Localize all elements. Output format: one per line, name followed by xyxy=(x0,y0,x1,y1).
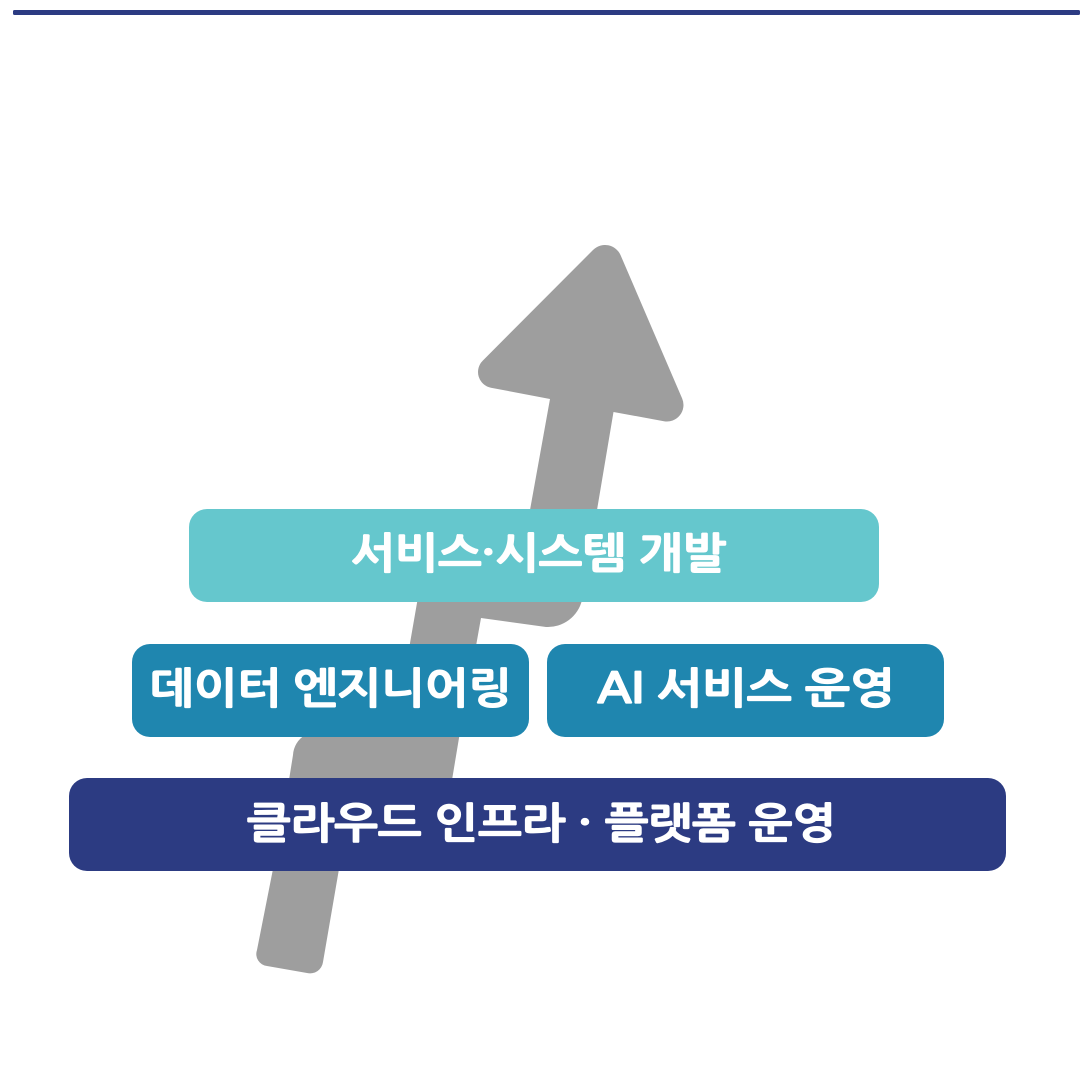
label: data engineering: 데이터 엔지니어링 xyxy=(150,667,512,710)
arrow lower segment xyxy=(289,735,460,780)
panel: AI service operations xyxy=(547,644,944,737)
icon: upward stepped arrow xyxy=(478,245,683,510)
panel: service and system development xyxy=(189,509,879,602)
label: AI service operations: AI 서비스 운영 xyxy=(597,667,895,710)
label: service and system development: 서비스·시스템 개발 xyxy=(351,532,727,575)
panel: data engineering xyxy=(132,644,529,737)
panel: cloud infrastructure and platform operations xyxy=(69,778,1006,871)
top rule xyxy=(13,10,1080,15)
label: cloud infrastructure and platform operations: 클라우드 인프라 · 플랫폼 운영 xyxy=(247,802,836,845)
arrow middle segment xyxy=(410,600,582,646)
arrow tail xyxy=(256,869,339,973)
